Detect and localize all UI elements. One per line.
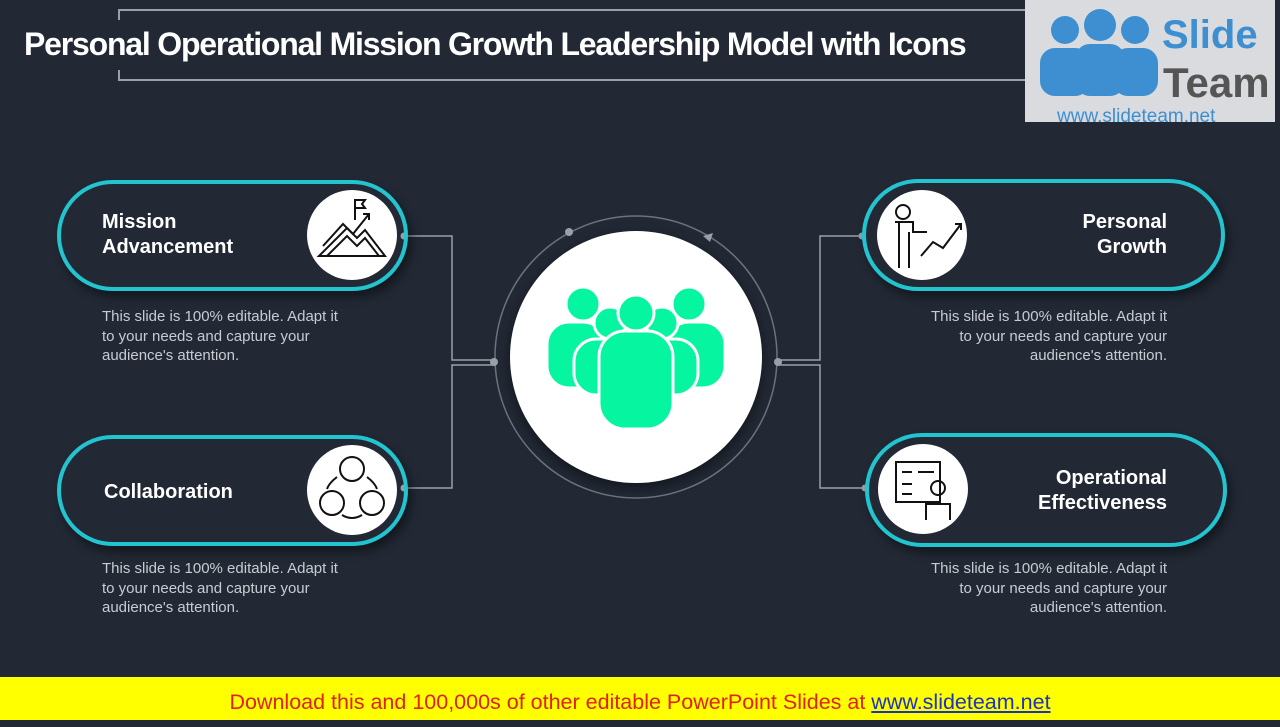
text: This slide is 100% editable. Adapt it to your needs and capture your audience's attention. <box>931 308 1167 364</box>
footer banner: Download this and 100,000s of other editable PowerPoint Slides at www.slideteam.net <box>229 690 1051 714</box>
panel: collaboration <box>57 435 408 546</box>
panel: personal growth <box>862 179 1225 291</box>
text: This slide is 100% editable. Adapt it to your needs and capture your audience's attention. <box>102 308 338 364</box>
text: Personal <box>1083 211 1167 233</box>
logo: Team <box>1163 59 1270 106</box>
text: Mission <box>102 211 176 233</box>
text: Growth <box>1097 236 1167 258</box>
title: Personal Operational Mission Growth Leadership Model with Icons <box>24 26 965 62</box>
footer banner <box>0 677 1280 720</box>
text: This slide is 100% editable. Adapt it to your needs and capture your audience's attention. <box>102 560 338 616</box>
panel: operational effectiveness <box>865 433 1227 547</box>
icon: growth <box>877 190 967 280</box>
logo: Slide <box>1162 13 1258 57</box>
center circle with team icon <box>510 231 762 483</box>
text: Advancement <box>102 236 233 258</box>
text: Effectiveness <box>1038 492 1167 514</box>
text: This slide is 100% editable. Adapt it to your needs and capture your audience's attention. <box>931 560 1167 616</box>
text: Operational <box>1056 467 1167 489</box>
icon: mountain <box>307 190 397 280</box>
connectors <box>404 216 865 498</box>
icon: collaboration <box>307 445 397 535</box>
panel: mission advancement <box>57 180 408 291</box>
text: Collaboration <box>104 481 233 503</box>
icon: presentation <box>878 444 968 534</box>
logo <box>1025 0 1275 122</box>
